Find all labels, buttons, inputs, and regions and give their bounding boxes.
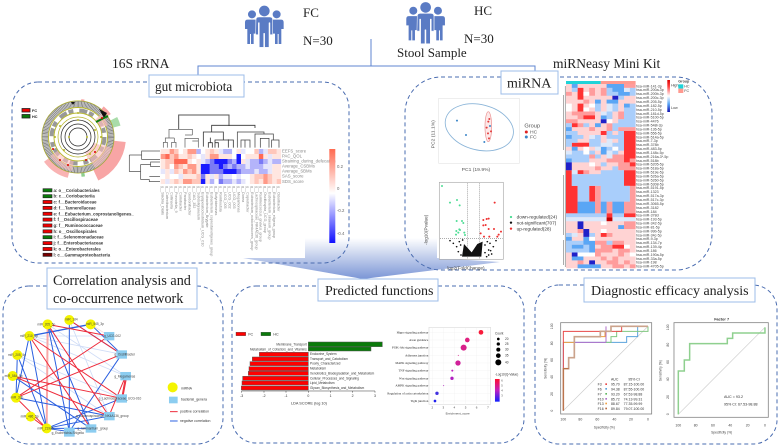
chart: multi-factor ROC: 60 [550, 358, 554, 362]
chart: miRNA heatmap [566, 84, 636, 268]
chart: LDA bar chart: Endocrine_System [310, 352, 337, 356]
text: miRNA labels: hsa-miR-526a-5p [636, 174, 664, 178]
chart: multi-factor ROC: 87.55-100.00 [624, 387, 644, 391]
panel: gut microbiota [12, 75, 349, 263]
chart: multi-factor ROC: 77.35-99.99 [624, 402, 642, 406]
chart: PCA plot: Group [524, 124, 540, 130]
chart: multi-factor ROC: 20 [629, 417, 633, 421]
chart: multi-factor ROC: 40 [550, 375, 554, 379]
chart: multi-factor ROC: 0 [550, 410, 554, 412]
text: miRNA labels: hsa-miR-134-7p [636, 241, 662, 245]
text: HC group: HC [474, 3, 492, 18]
text: heatmap row labels: SAS_score [282, 174, 304, 179]
text: miRNA labels: hsa-miR-141-3p [636, 84, 662, 88]
chart: KEGG dot plot: TNF signaling pathway [399, 369, 429, 373]
chart: LDA bar chart: -2 [262, 394, 266, 398]
heading: correlation analysis [47, 268, 197, 309]
chart: PCA plot: HC [530, 130, 538, 136]
chart: volcano plot: log2(FoldChange) [447, 265, 485, 270]
legend: dot plot: 20 [505, 337, 509, 341]
chart: LDA bar chart: Poorly_Characterized [310, 362, 341, 366]
text: heatmap column labels: g__Eubacterium_siraeum_group [268, 186, 272, 240]
text: HC group [464, 3, 494, 46]
chart: multi-factor ROC: 74.13-99.31 [624, 397, 642, 401]
chart: multi-factor ROC: 88.67 [611, 402, 620, 406]
legend: network: negative correlation [180, 419, 210, 423]
text: heatmap row labels: Average_SBMs [282, 169, 312, 174]
chart: PCA plot: FC [530, 135, 537, 141]
text: heatmap column labels: g__Subdoligranulum [196, 186, 200, 220]
text: miRNA labels: hsa-miR-184 [636, 210, 657, 214]
text: heatmap column labels: g__Coprobacter [245, 186, 249, 213]
text: heatmap column labels: g__Collinsella [170, 186, 174, 210]
text: miRNA labels: hsa-miR-5100-5p [636, 116, 664, 120]
chart: Factor 7 ROC: Factor 7 [714, 317, 729, 321]
chart: LDA bar chart: -3 [240, 394, 243, 398]
legend: taxa list: i: f__Selenomonadaceae [54, 235, 104, 240]
text: miRNA labels: hsa-miR-139-4p [636, 245, 662, 249]
text: miRNA labels: hsa-miR-5205-5p [636, 163, 664, 167]
heading: predicted functions [318, 279, 438, 301]
legend: dot plot: 6 [501, 379, 503, 383]
text: heatmap column labels: g__Eubacterium_oxidoreducens_group [250, 186, 254, 250]
text: miRNA labels: hsa-miR-9-3p [636, 237, 658, 241]
chart: Factor 7 ROC: 100 [666, 324, 670, 330]
chart: dendrogram left [129, 151, 160, 182]
flow connector lines [198, 39, 535, 75]
text: FC group [303, 5, 333, 48]
text: heatmap row labels: EEFS_score [282, 148, 307, 154]
chart: multi-factor ROC: 85.72 [611, 397, 620, 401]
chart: LDA bar chart [236, 332, 382, 406]
chart: LDA bar chart: Transport_and_Catabolism [310, 357, 348, 361]
legend: taxa list: h: o__Oscillospirales [54, 229, 97, 234]
chart: multi-factor ROC: AUC [611, 377, 619, 381]
heading: gut microbiota: gut microbiota [155, 79, 232, 94]
chart: Factor 7 ROC: AUC = 93.2 [724, 395, 743, 399]
icon: HC group people [406, 2, 445, 44]
chart: correlation heatmap [161, 149, 281, 184]
chart: LDA bar chart: 3 [374, 394, 376, 398]
legend: dot plot [495, 331, 518, 402]
heading: gut microbiota [149, 75, 244, 97]
chart: co-occurrence network: g_ruminantium_group [77, 426, 108, 430]
chart: cladogram [42, 99, 126, 180]
text: miRNA labels: hsa-miR-517a-3p [636, 194, 664, 198]
heading: predicted functions: Predicted functions [325, 284, 433, 299]
text: FC group: N=30 [303, 33, 333, 48]
chart: multi-factor ROC: Specificity (%) [594, 426, 615, 430]
text: miRNA labels: hsa-miR-99b-5p [636, 229, 662, 233]
legend: dot plot: 3 [501, 394, 503, 398]
text: stool sample: Stool Sample [397, 45, 467, 60]
heading: diagnostic efficacy [584, 278, 755, 302]
text: miRNA labels: hsa-miR-148c-5p [636, 151, 664, 155]
legend: dot plot: 25 [505, 342, 509, 346]
text: heatmap row labels: PAC_QOL [282, 154, 303, 159]
legend: taxa list: e: f__Eubacterium_coprostanoligenes_ [54, 211, 134, 216]
chart: KEGG dot plot: 7 [487, 406, 489, 410]
chart: LDA bar chart: -1 [284, 394, 288, 398]
heading: miRNA [501, 71, 558, 94]
chart: Factor 7 ROC: 40 [666, 377, 670, 381]
chart: volcano plot [423, 182, 557, 270]
chart: multi-factor ROC: F7 [598, 392, 602, 396]
panel: predicted functions [232, 279, 524, 443]
legend: dot plot: 40 [505, 360, 509, 364]
legend: taxa list: g: f__Ruminococcaceae [54, 223, 103, 228]
text: heatmap column labels: g__Gordonibacter [187, 186, 191, 216]
text: miRNA labels: hsa-miR-182-5p [636, 104, 662, 108]
chart: KEGG dot plot: Tight junction [410, 399, 429, 403]
legend: dot plot: 5 [501, 384, 503, 388]
text: heatmap column labels: g__Odoribacter [277, 186, 281, 212]
heading: correlation analysis: Correlation analysis and [53, 273, 191, 289]
chart: PCA plot [430, 97, 540, 173]
chart: KEGG dot plot: PI3K-Akt signaling pathway [392, 346, 429, 350]
text: heatmap column labels: g__Slackia_Dialis [161, 186, 165, 215]
legend: network [168, 382, 210, 423]
legend: miRNA heatmap: HC [684, 85, 690, 89]
text: miRNA labels: hsa-miR-136-5p [636, 127, 662, 131]
text: heatmap column labels: g__Eubacterium_coprostanoligenes_group [210, 186, 214, 256]
chart: Factor 7 ROC: 40 [728, 423, 732, 427]
legend: heatmap colour bar [329, 149, 345, 243]
chart: multi-factor ROC: F10 [598, 397, 604, 401]
text: heatmap row labels: Straining_during_defecation [282, 159, 336, 164]
heading: miRNA: miRNA [507, 76, 552, 92]
legend: miRNA heatmap: FC [684, 89, 690, 93]
text: miRNA labels: hsa-miR-5191-5p [636, 186, 664, 190]
chart: multi-factor ROC: 20 [550, 392, 554, 396]
chart: dendrogram top [163, 115, 279, 148]
text: heatmap row labels: Average_CSBMs [282, 164, 315, 169]
text: heatmap column labels: g__Parabacter [183, 186, 187, 211]
chart: co-occurrence network: miR_205_5p [8, 353, 26, 357]
text: heatmap column labels: g__UCG_005 [223, 186, 227, 209]
chart: co-occurrence network: miR_33b [11, 396, 24, 400]
chart: LDA bar chart: 1 [330, 394, 332, 398]
chart: co-occurrence network: miR_184 [65, 318, 78, 322]
chart: LDA bar chart: 0 [307, 394, 309, 398]
legend: dot plot: Count [495, 331, 504, 335]
legend: taxa list: c: f__Bacteroidaceae [54, 200, 97, 204]
chart: multi-factor ROC: F13 [598, 402, 604, 406]
chart: multi-factor ROC: F16 [598, 407, 604, 411]
chart: co-occurrence network: g_Escherichia-Shigella [52, 431, 84, 435]
text: heatmap column labels: g__Coriobacter [178, 186, 182, 212]
chart: multi-factor ROC: F6 [598, 387, 602, 391]
chart: multi-factor ROC: 79.07-100.00 [624, 407, 644, 411]
text: miRNA labels: hsa-miR-518b [636, 159, 659, 163]
chart: multi-factor ROC: 0 [647, 417, 649, 421]
text: miRNA labels: hsa-miR-4705-5p [636, 265, 664, 269]
chart: co-occurrence network: miR_545_3p [86, 322, 104, 326]
text: miRNA labels: hsa-miR-34c-5p [636, 233, 662, 237]
chart: KEGG dot plot: 6 [476, 406, 478, 410]
chart: co-occurrence network [5, 315, 142, 437]
text: miRNA labels: hsa-miR-5260-5p [636, 178, 664, 182]
legend: miRNA heatmap: Low [671, 106, 678, 110]
legend: network: positive correlation [180, 410, 209, 414]
chart: co-occurrence network: miR_584_5p [5, 374, 23, 378]
chart: Factor 7 ROC: 100 [675, 423, 681, 427]
text: miRNA labels: hsa-miR-4476 [636, 120, 659, 124]
text: miRNA labels: hsa-miR-342-5p [636, 222, 662, 226]
text: miRNA labels: hsa-miR-7-3p [636, 139, 658, 143]
chart: LDA bar chart: Glycan_Biosynthesis_and_Metabolism [310, 386, 365, 390]
chart: volcano plot: up-regulated(28) [517, 226, 552, 231]
chart: multi-factor ROC: 100 [550, 323, 554, 329]
text: miRNA labels: hsa-miR-556-5p [636, 131, 662, 135]
legend: network: bacterial_genera [181, 398, 207, 402]
chart: co-occurrence network: miR_210_5p [20, 334, 38, 338]
heading: correlation analysis: co-occurrence network [53, 291, 184, 307]
chart: KEGG dot plot: 4 [453, 406, 455, 410]
chart: multi-factor ROC: 95.70 [611, 383, 620, 387]
legend: heatmap colour bar: 0 [337, 186, 340, 191]
legend: taxa list: j: f__Enterobacteriaceae [52, 241, 104, 246]
chart: volcano plot: down-regulated(24) [517, 215, 557, 220]
panel: diagnostic efficacy analysis [535, 278, 777, 444]
text: heatmap column labels: g__Butyricimonas [214, 186, 218, 215]
text: miRNA labels: hsa-miR-200b-3p [636, 92, 664, 96]
chart: multi-factor ROC: 80 [550, 341, 554, 345]
chart: co-occurrence network: miR_486_5p [21, 414, 39, 418]
chart: co-occurrence network: g_Lachnospiraceae_NK4A136_group [76, 414, 129, 418]
chart: KEGG dot plot: Hippo signaling pathway [397, 330, 429, 334]
chart: LDA bar chart: Cellular_Processes_and_Signaling [310, 376, 359, 380]
legend: miRNA heatmap: High [671, 84, 679, 88]
chart: Factor 7 ROC: 20 [746, 423, 750, 427]
text: miRNA labels: hsa-miR-186 [636, 249, 657, 253]
chart: co-occurrence network: g_Oscillibacter [114, 353, 135, 357]
chart: multi-factor ROC: 80 [578, 417, 582, 421]
chart: Factor 7 ROC: 80 [666, 343, 670, 347]
chart: KEGG dot plot: Axon guidance [409, 338, 429, 342]
text: miRNA labels: hsa-miR-518a-5p [636, 167, 664, 171]
text: miRNA labels: hsa-miR-378b [636, 143, 659, 147]
text: heatmap column labels: g__Eubacterium_eligens_group [272, 186, 276, 238]
text: miRNA labels: hsa-miR-517c-3p [636, 198, 664, 202]
chart: Factor 7 ROC: 0 [666, 413, 670, 415]
text: miRNA labels: hsa-miR-200a-3p [636, 88, 664, 92]
chart: KEGG dot plot: 5 [465, 406, 467, 410]
chart: Factor 7 ROC: 95% CI: 67.53-98.88 [724, 403, 758, 407]
chart: Factor 7 ROC: Sensitivity (%) [659, 360, 663, 381]
legend: cladogram groups: FC [32, 109, 37, 113]
chart: KEGG dot plot: 2 [431, 406, 433, 410]
text: miRNeasy Mini Kit: miRNeasy Mini Kit [553, 56, 660, 71]
chart: multi-factor ROC: 93.20 [611, 392, 620, 396]
chart: multi-factor ROC: 67.53-98.88 [624, 392, 642, 396]
text: heatmap column labels: g__Prevotella_9 [174, 186, 178, 213]
chart: Factor 7 ROC: 60 [711, 423, 715, 427]
legend: taxa list: f: f__Oscillospiraceae [54, 217, 99, 222]
text: HC group: N=30 [464, 31, 494, 46]
text: heatmap column labels: g__Romboutsia [219, 186, 223, 213]
legend: dot plot: -Log10(Q-Value) [495, 372, 518, 376]
chart: KEGG dot plot: Enrichment_score [446, 411, 470, 415]
text: miRNA labels: hsa-miR-3182 [636, 206, 659, 210]
text: miRNA labels: hsa-miR-81-5p [636, 225, 660, 229]
chart: PCA plot: PC2 (11.1%) [430, 120, 436, 148]
legend: cladogram groups [22, 108, 38, 119]
chart: KEGG dot plot [387, 327, 491, 415]
text: miRNA labels: hsa-miR-519e-5p [636, 171, 664, 175]
text: miRNA labels: hsa-miR-190a-5p [636, 253, 664, 257]
icon: FC group people [245, 6, 284, 47]
text: miRNA labels: hsa-miR-193-5p [636, 218, 662, 222]
legend: taxa list: d: f__Tannerellaceae [54, 205, 96, 210]
legend: taxa list: b: c__Coriobacteriia [54, 194, 95, 199]
text: heatmap row labels: SDS_score [282, 179, 304, 184]
legend: dot plot: 4 [501, 389, 503, 393]
legend: network: miRNA [181, 386, 193, 390]
legend: dot plot: 30 [505, 348, 509, 352]
chart: Factor 7 ROC: 0 [764, 423, 766, 427]
text: heatmap column labels: g__Oscillospira_UCG_group [263, 186, 267, 233]
chart: KEGG dot plot: AMPK signaling pathway [395, 384, 429, 388]
text: miRNA labels: hsa-miR-181d-5p [636, 112, 664, 116]
chart: co-occurrence network: miR_219a5 [37, 426, 54, 430]
chart: multi-factor ROC: 89.84 [611, 407, 620, 411]
chart: multi-factor ROC: F3 [598, 383, 602, 387]
arrow: gradient down arrow to lower panels [243, 238, 500, 279]
text: miRNA labels: hsa-miR-1323 [636, 190, 659, 194]
text: miRNA labels: hsa-miR-205-5p [636, 100, 662, 104]
chart: LDA bar chart: LDA SCORE (log 10) [291, 402, 328, 406]
legend: taxa list: a: o__Coriobacteriales [54, 188, 100, 193]
legend: miRNA heatmap: Group [678, 80, 690, 84]
text: miRNA labels: hsa-miR-3065-5p [636, 202, 664, 206]
legend: taxa list: l: c__Gammaproteobacteria [54, 252, 111, 257]
chart: multi-factor ROC: 60 [595, 417, 599, 421]
chart: LDA bar chart: Xenobiotics_Biodegradation_and_Metabolism [310, 371, 375, 375]
text: miRNA labels: hsa-miR-210-5p [636, 108, 662, 112]
chart: multi-factor ROC: Sensitivity (%) [544, 358, 548, 379]
chart: KEGG dot plot: Adherens junction [405, 353, 429, 357]
chart: LDA bar chart: FC [248, 332, 254, 336]
chart: Factor 7 ROC: 60 [666, 360, 670, 364]
text: miRNA labels: hsa-miR-514a-5p [636, 135, 664, 139]
legend: heatmap colour bar: -0.2 [337, 208, 345, 213]
chart: KEGG dot plot: MAPK signaling pathway [395, 361, 429, 365]
text: miRNA labels: hsa-miR-216a-3*-5p [636, 155, 668, 159]
text: heatmap column labels: g__UCG_002 [228, 186, 232, 209]
chart: KEGG dot plot: Regulation of actin cytoskeleton [387, 391, 429, 395]
text: miRNA labels: hsa-miR-483-5p [636, 147, 662, 151]
text: heatmap column labels: g__Lachnospiraceae_NK4A136_group [254, 186, 258, 250]
text: heatmap column labels: g__Eubacterium_Brygate [205, 186, 209, 228]
chart: volcano plot: -log10(Pvalue) [423, 214, 428, 245]
chart: co-occurrence network: g_Lachnospiraceae_UCG-010 [99, 396, 142, 400]
chart: miRNA heatmap dendrogram [564, 86, 565, 267]
chart: LDA bar chart: Metabolism [310, 367, 326, 371]
legend: miRNA heatmap [667, 80, 690, 112]
chart: multi-factor ROC: 94.38 [611, 387, 620, 391]
chart: LDA bar chart: Lipid_Metabolism [310, 381, 335, 385]
panel: miRNA [405, 71, 712, 270]
text: heatmap column labels: g__Catenibacterium [165, 186, 169, 219]
text: heatmap column labels [161, 186, 281, 256]
chart: co-occurrence network: miR_205_5p [37, 322, 55, 326]
chart: Factor 7 ROC: 80 [694, 423, 698, 427]
legend: cladogram groups: HC [32, 115, 38, 119]
heading: diagnostic efficacy: Diagnostic efficacy analysis [591, 284, 749, 299]
text: heatmap column labels: g__Megamonas [236, 186, 240, 213]
text: heatmap row labels [282, 148, 336, 184]
text: heatmap column labels: g__CAG_352 [192, 186, 196, 208]
panel: correlation analysis and co-occurrence network [3, 268, 223, 444]
legend: taxa list: k: o__Enterobacterales [54, 246, 101, 252]
chart: PCA plot: PC1 (19.9%) [462, 167, 491, 173]
text: heatmap column labels: g__Ruminococcus_gnavus_group [259, 186, 263, 242]
text: heatmap column labels: g__Erysipelatoclostridium_UCG_010 [201, 186, 205, 246]
chart: co-occurrence network: g_UCG-002 [104, 334, 121, 338]
chart: multi-factor ROC: 87.15-100.00 [624, 383, 644, 387]
legend: taxa list [43, 188, 134, 257]
text: miRNA labels: hsa-miR-200c-3p [636, 96, 664, 100]
chart: co-occurrence network: g_Megamonas [114, 374, 136, 378]
chart: KEGG dot plot: Wnt signaling pathway [399, 376, 429, 380]
chart: multi-factor ROC: 40 [612, 417, 616, 421]
text: miRNA labels: hsa-miR-548l-3p [636, 124, 663, 128]
chart: KEGG dot plot: 3 [442, 406, 444, 410]
chart: multi-factor ROC: 95% CI [628, 377, 640, 381]
text: miRNA labels: hsa-miR-378d [636, 214, 659, 218]
text: FC group: FC [303, 5, 319, 20]
chart: volcano plot: not-significant(707) [517, 220, 557, 225]
chart: multi-factor ROC [544, 323, 652, 430]
text: miRNA labels: hsa-miR-5308-5p [636, 182, 664, 186]
chart: LDA bar chart: 2 [352, 394, 354, 398]
text: miRNA labels: hsa-miR-33a-5p [636, 257, 662, 261]
chart: multi-factor ROC: 100 [560, 417, 566, 421]
chart: LDA bar chart: HC [273, 332, 279, 336]
legend: heatmap colour bar: 0.2 [337, 164, 344, 169]
text: 16S rRNA: 16S rRNA [112, 56, 170, 71]
text: miRNA labels: hsa-miR-198 [636, 261, 657, 265]
text: heatmap column labels: g__Dorea [241, 186, 245, 203]
text: heatmap column labels: g__UCG_003 [232, 186, 236, 209]
chart: Factor 7 ROC [659, 317, 768, 435]
legend: dot plot: 35 [505, 354, 509, 358]
chart: Factor 7 ROC: 20 [666, 395, 670, 399]
legend: heatmap colour bar: -0.4 [337, 231, 345, 236]
chart: miRNA heatmap group bar [566, 81, 636, 84]
chart: LDA bar chart: Metabolism_of_Cofactors_and_Vitamins [250, 347, 307, 351]
chart: Factor 7 ROC: Specificity (%) [711, 431, 732, 435]
chart: LDA bar chart: Membrane_Transport [276, 342, 307, 346]
